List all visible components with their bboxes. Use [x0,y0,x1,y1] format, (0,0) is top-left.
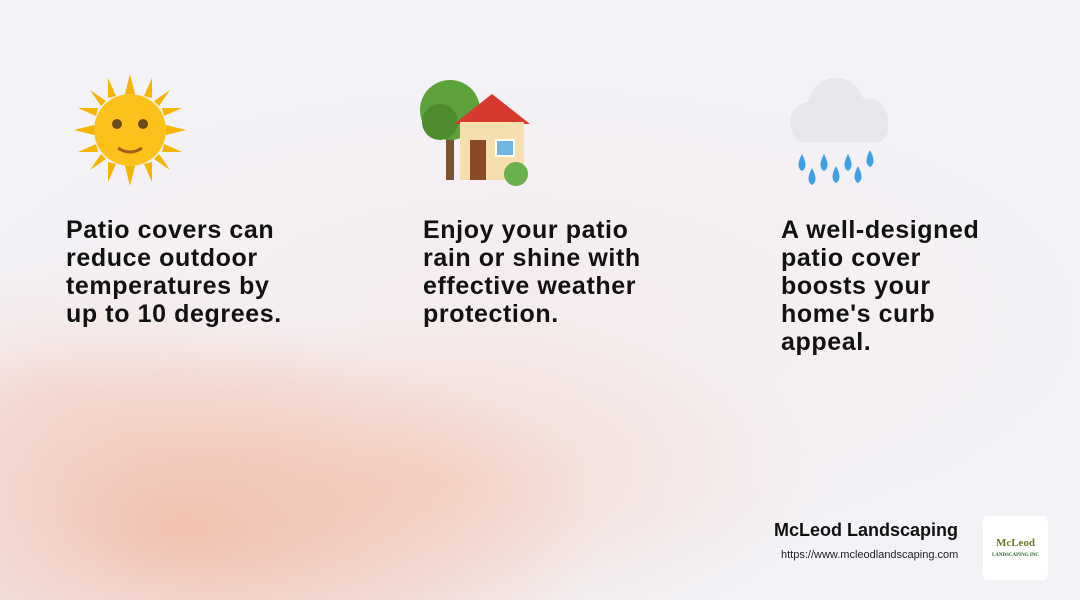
icon: sun [74,74,186,186]
text: curb appeal: A well-designed patio cover boosts your home's curb appeal. [781,216,979,356]
brand name: McLeod Landscaping [774,520,958,540]
logo [983,516,1048,580]
text: temperature: Patio covers can reduce outdoor temperatures by up to 10 degrees. [66,216,282,328]
brand url: https://www.mcleodlandscaping.com [781,549,958,561]
logo: LANDSCAPING INC [992,553,1039,558]
logo: McLeod [996,537,1035,549]
text: weather: Enjoy your patio rain or shine with effective weather protection. [423,216,641,328]
icon: house with tree [420,80,530,186]
icon: rain cloud [790,78,888,185]
